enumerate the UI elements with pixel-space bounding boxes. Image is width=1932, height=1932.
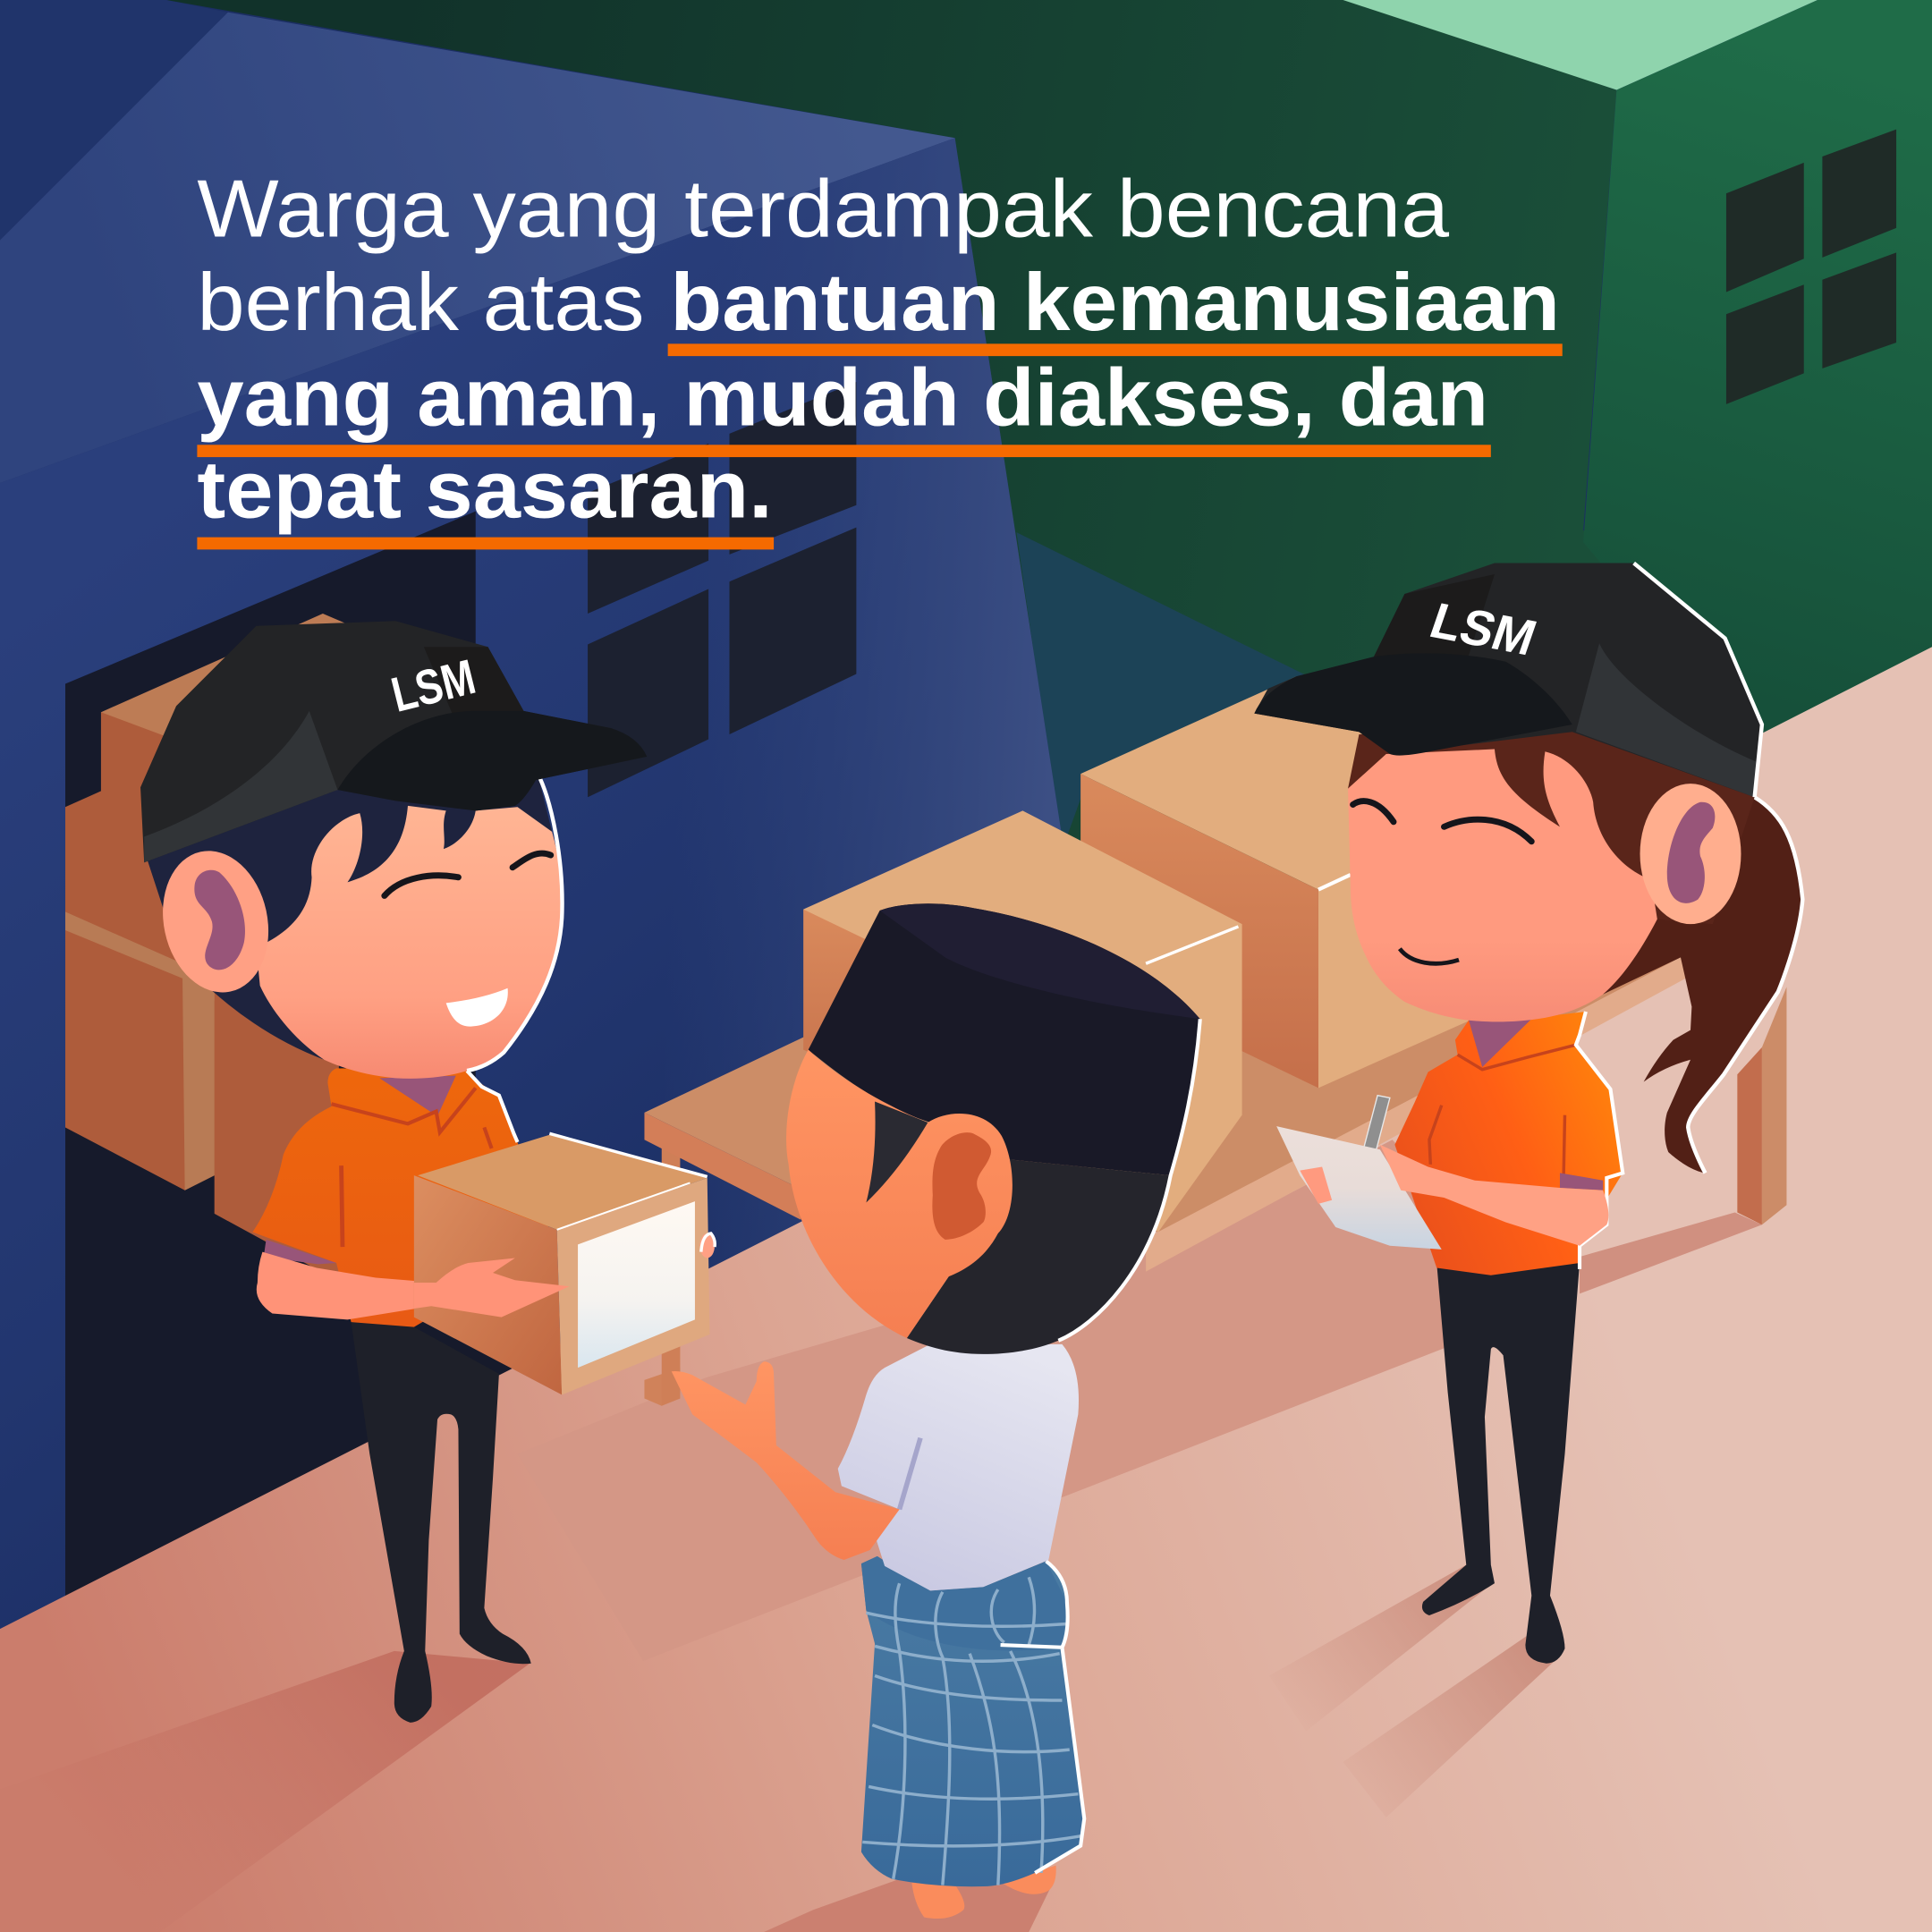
hair <box>907 1159 1171 1354</box>
fingertip <box>699 1233 715 1258</box>
pen <box>1364 1096 1390 1149</box>
cap text: LSM <box>1423 593 1543 666</box>
face <box>257 806 563 1079</box>
white outline: shirt <box>1576 1012 1623 1269</box>
hair <box>1348 727 1755 995</box>
hair <box>144 773 552 1060</box>
smile <box>446 988 508 1027</box>
white outline: ponytail <box>1688 797 1802 1173</box>
white outline: face <box>467 773 563 1071</box>
held box <box>414 1133 715 1394</box>
cap <box>1254 564 1762 797</box>
highlight 3: tepat sasaran. <box>197 445 773 536</box>
finger <box>1300 1167 1332 1204</box>
arm <box>672 1361 900 1560</box>
cap text: LSM <box>386 648 480 723</box>
shirt <box>1394 1012 1623 1275</box>
box label <box>578 1201 695 1368</box>
headline <box>197 164 1563 549</box>
stacked boxes: left <box>65 614 357 1282</box>
shirt <box>252 1068 555 1327</box>
face <box>786 1050 1013 1338</box>
highlight 1: bantuan kemanusiaan <box>670 258 1560 348</box>
feet <box>911 1866 1056 1919</box>
pants <box>1422 1263 1580 1664</box>
floor shadows <box>0 1564 1559 1932</box>
ear <box>1640 784 1741 924</box>
box: right on table <box>1080 676 1479 1088</box>
headline line 2: berhak atas <box>197 258 644 348</box>
ponytail <box>1528 789 1802 1173</box>
window: green building <box>1726 130 1896 404</box>
face <box>1348 750 1657 1021</box>
pants <box>352 1322 531 1723</box>
character: villager seen from behind <box>672 903 1200 1919</box>
box: middle on table <box>803 810 1242 1233</box>
ear <box>150 841 281 1003</box>
character: right aid worker <box>1254 564 1802 1664</box>
smile <box>1400 949 1459 963</box>
headline line 1: Warga yang terdampak bencana <box>197 164 1449 254</box>
floor <box>0 647 1932 1932</box>
sarong <box>861 1556 1084 1886</box>
cap <box>140 621 647 862</box>
sideburn <box>866 1102 928 1202</box>
white outline: shirt <box>467 1071 518 1142</box>
arm <box>1380 1145 1608 1246</box>
highlight 2: yang aman, mudah diakses, dan <box>197 352 1488 443</box>
paper <box>1276 1126 1442 1250</box>
table <box>644 924 1786 1406</box>
eyes <box>385 853 551 895</box>
box top edge highlight <box>557 1182 690 1230</box>
arm <box>257 1252 569 1319</box>
dark doorway recess <box>65 512 523 1602</box>
peci cap <box>809 903 1200 1175</box>
t-shirt <box>838 1344 1079 1590</box>
white outline: box <box>549 1133 708 1177</box>
white outline: head <box>1058 1019 1200 1341</box>
hand over box <box>414 1258 569 1318</box>
eyes <box>1353 801 1531 842</box>
white outline: sarong <box>1001 1561 1084 1873</box>
white outline: cap <box>1634 564 1762 797</box>
inner ear <box>932 1132 991 1240</box>
character: left aid worker <box>140 621 647 1723</box>
window: blue building <box>588 382 856 797</box>
